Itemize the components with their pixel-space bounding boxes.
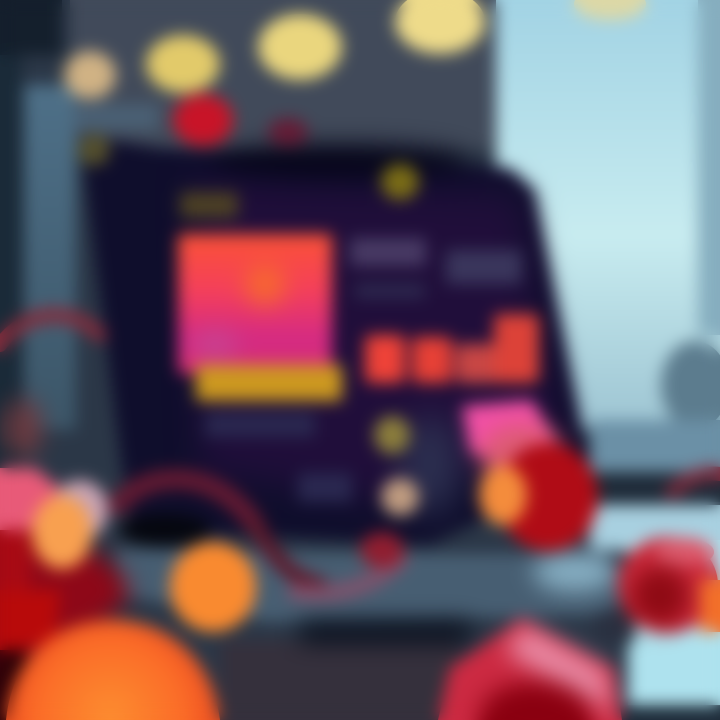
light 5 (574, 0, 646, 20)
small yellow tab (78, 134, 110, 166)
gradient card (178, 234, 332, 374)
light 4 (395, 0, 485, 54)
red bar chart (365, 314, 539, 383)
laptop screen (78, 134, 590, 545)
grey text lines (205, 238, 522, 515)
crystal: red shape bottom centre-right (438, 618, 622, 720)
ribbon: red swoosh across keyboard (0, 315, 720, 594)
light 3 (258, 14, 342, 80)
red sphere: above laptop (173, 94, 233, 146)
pink card (462, 400, 556, 466)
sphere: orange on keyboard (170, 542, 256, 632)
light 1 (64, 51, 116, 99)
window: bright light on the right (496, 0, 720, 502)
tan dot one (374, 416, 410, 454)
ceiling lights (64, 0, 646, 99)
laptop keyboard base (115, 550, 635, 644)
light 2 (146, 35, 220, 93)
heading chip (180, 192, 238, 218)
yellow strip (196, 365, 342, 401)
red sphere: small, above laptop (268, 118, 308, 146)
sphere: red with orange glow on laptop (479, 425, 598, 551)
yellow notch (381, 164, 419, 200)
sphere: large orange bottom left (6, 620, 220, 720)
sphere group: left cluster (0, 398, 130, 720)
sphere: red on right (618, 537, 720, 633)
tan dot two (381, 478, 419, 516)
desk surface (220, 505, 720, 720)
